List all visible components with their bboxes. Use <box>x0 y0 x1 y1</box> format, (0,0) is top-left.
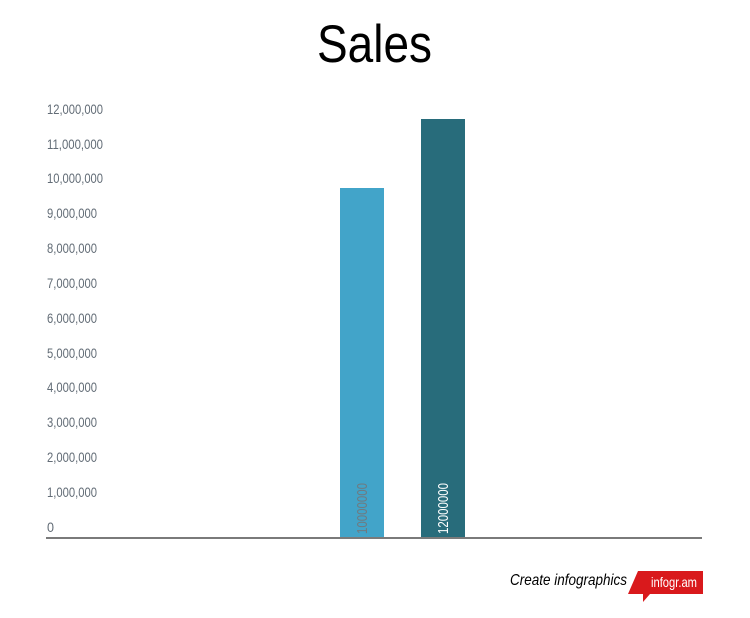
infogr.am logo badge <box>628 571 703 602</box>
y axis labels: 6,000,000 <box>47 310 97 326</box>
y axis labels: 10,000,000 <box>47 170 103 186</box>
title: Sales <box>317 15 432 74</box>
x axis line <box>46 537 702 539</box>
y axis labels: 4,000,000 <box>47 379 97 395</box>
y axis labels <box>47 101 103 535</box>
y axis labels: 2,000,000 <box>47 449 97 465</box>
bar value label: 10000000: 10000000 <box>355 483 371 534</box>
y axis labels: 5,000,000 <box>47 345 97 361</box>
bar: 12000000 <box>421 119 465 538</box>
y axis labels: 9,000,000 <box>47 205 97 221</box>
y axis labels: 11,000,000 <box>47 136 103 152</box>
y axis labels: 3,000,000 <box>47 414 97 430</box>
logo text: infogr.am <box>651 574 697 590</box>
bar: 10000000 <box>340 188 384 538</box>
y axis labels: 7,000,000 <box>47 275 97 291</box>
y axis labels: 0 <box>47 519 54 535</box>
y axis labels: 8,000,000 <box>47 240 97 256</box>
y axis labels: 12,000,000 <box>47 101 103 117</box>
y axis labels: 1,000,000 <box>47 484 97 500</box>
footer credit text: Create infographics <box>510 572 627 589</box>
bar value label: 12000000: 12000000 <box>436 483 452 534</box>
